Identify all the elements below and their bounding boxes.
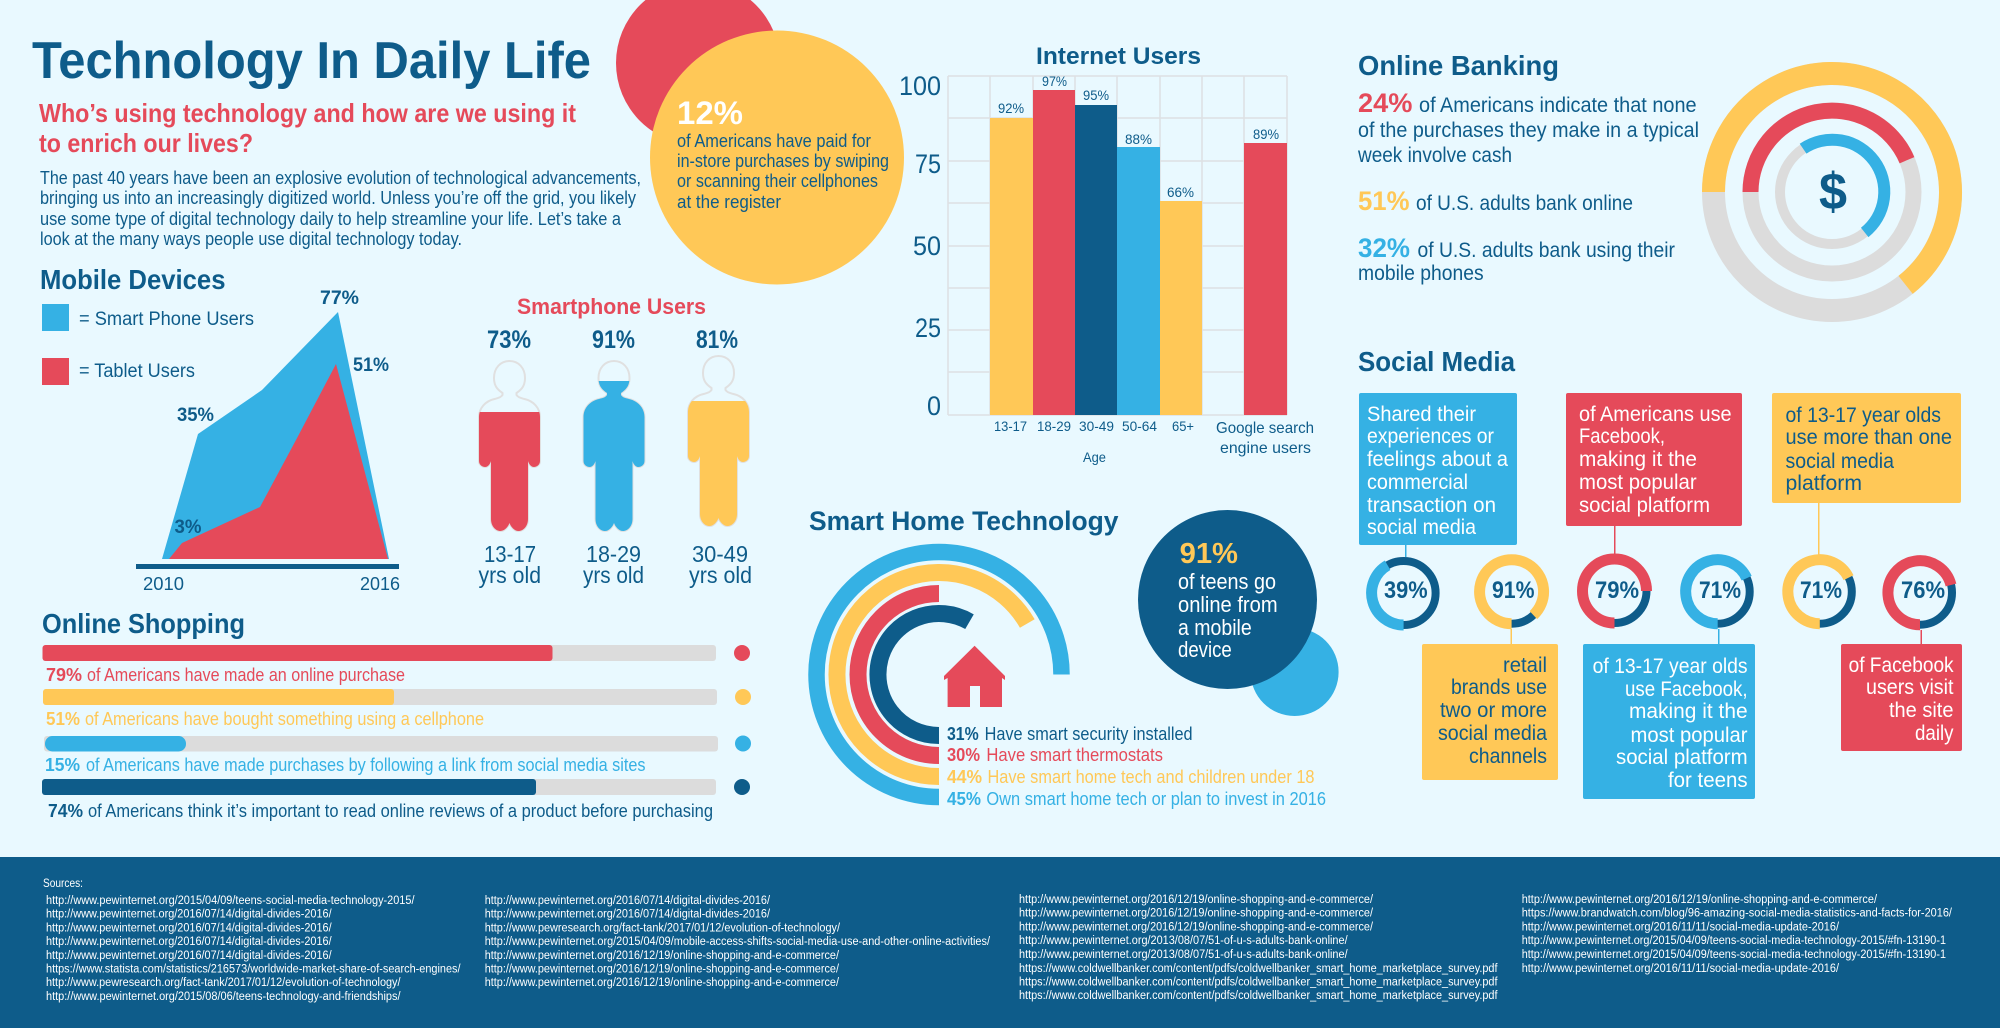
figure: 18-29: 18-29	[586, 541, 641, 567]
callout: 39% shared experiences	[1359, 393, 1517, 625]
heading: smartphone users: Smartphone Users	[517, 294, 706, 319]
bar chart: Age	[1083, 449, 1106, 465]
sources column 1: http://www.pewinternet.org/2016/07/14/digital-divides-2016/	[46, 950, 332, 962]
callout: 71% teens use Facebook: social platform	[1616, 746, 1748, 769]
sources column 2: http://www.pewinternet.org/2016/07/14/digital-divides-2016/	[485, 895, 771, 907]
callout: 12% circles: at the register	[677, 192, 781, 212]
callout: 91% of teens: a mobile	[1178, 615, 1252, 640]
figure: 30-49: 30-49	[692, 541, 748, 567]
sources column 2: http://www.pewinternet.org/2016/12/19/online-shopping-and-e-commerce/	[485, 964, 840, 976]
sources column 2	[485, 895, 991, 989]
callout: 76% visit daily: users visit	[1866, 676, 1954, 699]
bar: social media purchases 15%: 15%	[45, 755, 80, 775]
sources column 1: http://www.pewinternet.org/2015/08/06/teens-technology-and-friendships/	[46, 991, 401, 1003]
sources column 1: http://www.pewinternet.org/2016/07/14/digital-divides-2016/	[46, 922, 332, 934]
figure: 18-29	[583, 326, 644, 588]
callout: 91% of teens: of teens go	[1178, 569, 1276, 594]
stat: 24% no cash	[1357, 88, 1699, 167]
bar chart: 100	[899, 71, 941, 101]
figure: 30-49: 81%	[696, 326, 738, 354]
sources column 3: http://www.pewinternet.org/2013/08/07/51-of-u-s-adults-bank-online/	[1019, 949, 1348, 961]
sources column 3: http://www.pewinternet.org/2016/12/19/online-shopping-and-e-commerce/	[1019, 894, 1374, 906]
radial chart	[816, 552, 1062, 797]
sources column 3: http://www.pewinternet.org/2013/08/07/51-of-u-s-adults-bank-online/	[1019, 935, 1348, 947]
callout: 12% circles: or scanning their cellphones	[677, 171, 878, 191]
bar: bought with cellphone 51%: 51%	[46, 709, 80, 729]
panel: social media	[1358, 346, 1962, 799]
callout: 39% shared experiences: commercial	[1367, 471, 1468, 494]
bar: online reviews 74%: of Americans think it’s important to read online reviews of a product before purchasing	[88, 801, 713, 821]
sources column 3: http://www.pewinternet.org/2016/12/19/online-shopping-and-e-commerce/	[1019, 922, 1374, 934]
callout: 39% shared experiences: feelings about a	[1367, 448, 1508, 471]
legend: smart home stats: 45%	[947, 789, 981, 809]
bar: bought with cellphone 51%: of Americans have bought something using a cellphone	[85, 709, 484, 729]
callout: 91% of teens	[1138, 510, 1339, 716]
callout: 12% circles: of Americans have paid for	[677, 131, 871, 151]
sources column 3	[1019, 894, 1498, 1002]
callout: 76% visit daily: the site	[1889, 699, 1954, 722]
sources column 4: https://www.brandwatch.com/blog/96-amazing-social-media-statistics-and-facts-for-2016/	[1522, 908, 1953, 920]
callout: 76% visit daily: daily	[1915, 722, 1954, 745]
sources column 2: http://www.pewinternet.org/2016/12/19/online-shopping-and-e-commerce/	[485, 950, 840, 962]
legend: smart home stats: Have smart security installed	[985, 724, 1193, 744]
callout: 91% of teens: 91%	[1180, 538, 1238, 570]
intro paragraph: bringing us into an increasingly digitized world. Unless you’re off the grid, you likely	[40, 188, 636, 208]
sources column 3: https://www.coldwellbanker.com/content/pdfs/coldwellbanker_smart_home_marketplace_survey.pdf	[1019, 990, 1498, 1002]
area chart: 77%	[320, 288, 359, 309]
legend: tablet users: = Tablet Users	[79, 361, 195, 382]
bar chart: 65+	[1172, 418, 1194, 434]
panel: mobile devices	[40, 264, 400, 594]
figure: 13-17: 13-17	[484, 541, 536, 567]
panel: smartphone users	[478, 294, 752, 588]
title: Technology In Daily Life	[32, 32, 591, 90]
callout: 91% retail brands	[1422, 560, 1558, 780]
callout: 12% circles: in-store purchases by swiping	[677, 151, 889, 171]
stat: 24% no cash: of Americans indicate that none	[1419, 94, 1697, 117]
stat: 51% bank online	[1358, 186, 1633, 216]
callout: 79% Americans use Facebook: Facebook,	[1579, 425, 1665, 448]
intro paragraph: The past 40 years have been an explosive evolution of technological advancements,	[40, 168, 641, 188]
panel: smart home technology	[809, 506, 1326, 809]
bar chart: 95%	[1083, 87, 1109, 103]
figure: 30-49	[688, 326, 752, 588]
callout: 79% Americans use Facebook: social platform	[1579, 494, 1710, 517]
stat: 32% mobile banking: mobile phones	[1358, 262, 1484, 285]
callout: 79% Americans use Facebook: 79%	[1595, 577, 1639, 604]
area chart: 51%	[353, 355, 389, 376]
callout: 71% teens use Facebook: for teens	[1668, 769, 1748, 792]
area chart	[136, 288, 400, 594]
bar: online purchase 79%: 79%	[46, 665, 82, 685]
callout: 71% teens use Facebook	[1583, 560, 1755, 799]
stat: 24% no cash: 24%	[1358, 88, 1412, 118]
callout: 39% shared experiences: transaction on	[1367, 494, 1496, 517]
ring chart	[1714, 74, 1950, 310]
bar: bought with cellphone 51%	[43, 689, 751, 729]
area chart: 2010	[143, 574, 184, 594]
callout: 91% retail brands: two or more	[1440, 699, 1547, 722]
figure: 13-17	[478, 326, 541, 588]
bar: online reviews 74%: 74%	[48, 801, 83, 821]
bar: social media purchases 15%: of Americans have made purchases by following a link from social media sites	[86, 755, 646, 775]
bar: social media purchases 15%	[44, 736, 751, 775]
bar chart: 88%	[1125, 131, 1152, 147]
panel: online banking	[1357, 50, 1950, 310]
stat: 32% mobile banking: 32%	[1358, 233, 1410, 263]
bar: online reviews 74%	[42, 779, 750, 821]
heading: sources: Sources:	[43, 878, 83, 890]
sources column 3: https://www.coldwellbanker.com/content/pdfs/coldwellbanker_smart_home_marketplace_survey.pdf	[1019, 963, 1498, 975]
area chart: 35%	[177, 405, 214, 426]
bar chart: 25	[915, 313, 941, 343]
sources column 3: https://www.coldwellbanker.com/content/pdfs/coldwellbanker_smart_home_marketplace_survey.pdf	[1019, 976, 1498, 988]
sources column 3: http://www.pewinternet.org/2016/12/19/online-shopping-and-e-commerce/	[1019, 908, 1374, 920]
callout: 12% circles: 12%	[677, 95, 743, 131]
callout: 91% retail brands: social media	[1438, 722, 1547, 745]
figure: 13-17: yrs old	[478, 562, 541, 588]
sources column 2: http://www.pewinternet.org/2016/12/19/online-shopping-and-e-commerce/	[485, 977, 840, 989]
area chart: 3%	[174, 517, 202, 538]
legend: smart home stats: Have smart home tech and children under 18	[988, 767, 1314, 787]
stat: 51% bank online: 51%	[1358, 186, 1410, 216]
callout: 71% more than one platform: platform	[1786, 472, 1862, 495]
callout: 12% circles	[616, 0, 904, 284]
callout: 71% teens use Facebook: of 13-17 year olds	[1593, 655, 1748, 678]
callout: 71% more than one platform: of 13-17 year olds	[1786, 404, 1941, 427]
bar chart: 92%	[998, 100, 1024, 116]
bar chart: 0	[927, 391, 941, 421]
subtitle	[39, 98, 576, 158]
figure: 18-29: yrs old	[583, 562, 644, 588]
bar: online purchase 79%	[42, 645, 750, 685]
callout: 71% more than one platform	[1772, 393, 1961, 624]
intro paragraph	[40, 168, 641, 249]
bar chart: 50	[913, 231, 941, 261]
callout: 76% visit daily	[1841, 561, 1962, 751]
sources column 1: https://www.statista.com/statistics/216573/worldwide-market-share-of-search-engines/	[46, 964, 461, 976]
legend: tablet users	[42, 358, 195, 385]
bar chart: 50-64	[1122, 418, 1157, 434]
figure: 30-49: yrs old	[689, 562, 752, 588]
callout: 39% shared experiences: 39%	[1384, 577, 1428, 604]
callout: 79% Americans use Facebook: of Americans use	[1579, 403, 1732, 426]
intro paragraph: use some type of digital technology daily to help streamline your life. Let’s take a	[40, 209, 622, 229]
callout: 91% of teens: online from	[1178, 592, 1278, 617]
bar chart: 18-29	[1037, 418, 1071, 434]
bar chart: 97%	[1042, 73, 1067, 89]
sources column 2: http://www.pewinternet.org/2015/04/09/mobile-access-shifts-social-media-use-and-other-online-activities/	[485, 936, 991, 948]
heading: smart home technology: Smart Home Technology	[809, 506, 1118, 536]
stat: 24% no cash: of the purchases they make in a typical	[1358, 119, 1699, 142]
sources column 4: http://www.pewinternet.org/2015/04/09/teens-social-media-technology-2015/#fn-13190-1	[1522, 949, 1946, 961]
sources column 1: http://www.pewresearch.org/fact-tank/2017/01/12/evolution-of-technology/	[46, 977, 401, 989]
callout: 71% more than one platform: use more than one	[1786, 426, 1952, 449]
legend: smart phone users: = Smart Phone Users	[79, 309, 254, 330]
callout: 71% teens use Facebook: use Facebook,	[1625, 678, 1748, 701]
callout: 71% teens use Facebook: making it the	[1629, 700, 1748, 723]
sources column 4: http://www.pewinternet.org/2015/04/09/teens-social-media-technology-2015/#fn-13190-1	[1522, 935, 1946, 947]
callout: 79% Americans use Facebook: making it the	[1579, 448, 1697, 471]
heading: online shopping: Online Shopping	[42, 608, 245, 639]
sources column 4: http://www.pewinternet.org/2016/11/11/social-media-update-2016/	[1522, 922, 1840, 934]
sources column 1: http://www.pewinternet.org/2016/07/14/digital-divides-2016/	[46, 936, 332, 948]
icon: house	[944, 646, 1005, 707]
legend: smart phone users	[42, 304, 254, 331]
callout: 76% visit daily: 76%	[1901, 577, 1945, 604]
bar chart: 66%	[1167, 184, 1194, 200]
legend: smart home stats: Own smart home tech or plan to invest in 2016	[986, 789, 1326, 809]
stat: 24% no cash: week involve cash	[1357, 144, 1512, 167]
sources column 1: http://www.pewinternet.org/2016/07/14/digital-divides-2016/	[46, 909, 332, 921]
callout: 76% visit daily: of Facebook	[1849, 654, 1954, 677]
callout: 39% shared experiences: experiences or	[1367, 425, 1494, 448]
heading: mobile devices: Mobile Devices	[40, 264, 226, 295]
callout: 39% shared experiences: Shared their	[1367, 403, 1476, 426]
sources column 4	[1522, 894, 1953, 975]
icon: dollar sign: $	[1819, 163, 1847, 221]
callout: 39% shared experiences: social media	[1367, 516, 1476, 539]
sources column 4: http://www.pewinternet.org/2016/11/11/social-media-update-2016/	[1522, 963, 1840, 975]
callout: 91% retail brands: 91%	[1492, 577, 1534, 604]
callout: 71% teens use Facebook: most popular	[1630, 724, 1748, 747]
bar chart: engine users	[1220, 440, 1311, 457]
subtitle: Who’s using technology and how are we using it	[39, 98, 576, 128]
bar chart: 89%	[1253, 126, 1279, 142]
callout: 79% Americans use Facebook: most popular	[1579, 471, 1697, 494]
bar chart: 30-49	[1079, 418, 1114, 434]
heading: online banking: Online Banking	[1358, 50, 1559, 81]
bar chart	[899, 71, 1314, 465]
callout: 91% retail brands: retail	[1503, 654, 1547, 677]
legend: smart home stats: 30%	[947, 745, 980, 765]
callout: 91% retail brands: channels	[1469, 745, 1547, 768]
stat: 32% mobile banking	[1358, 233, 1675, 285]
legend: smart home stats: 44%	[947, 767, 982, 787]
panel: intro header	[32, 32, 641, 249]
bar: online purchase 79%: of Americans have made an online purchase	[87, 665, 405, 685]
bar chart: 75	[915, 149, 941, 179]
legend: smart home stats: Have smart thermostats	[986, 745, 1163, 765]
legend: smart home stats: 31%	[947, 724, 979, 744]
heading: social media: Social Media	[1358, 346, 1515, 377]
panel: online shopping	[42, 608, 751, 821]
callout: 91% of teens: device	[1178, 637, 1232, 662]
callout: 79% Americans use Facebook	[1566, 393, 1742, 623]
subtitle: to enrich our lives?	[39, 128, 253, 158]
sources column 4: http://www.pewinternet.org/2016/12/19/online-shopping-and-e-commerce/	[1522, 894, 1878, 906]
callout: 71% more than one platform: social media	[1786, 450, 1894, 473]
stat: 51% bank online: of U.S. adults bank online	[1416, 192, 1633, 215]
area chart: 2016	[360, 574, 400, 594]
panel: sources footer	[0, 857, 2000, 1028]
callout: 71% teens use Facebook: 71%	[1699, 577, 1741, 604]
intro paragraph: look at the many ways people use digital technology today.	[40, 229, 462, 249]
sources column 1: http://www.pewinternet.org/2015/04/09/teens-social-media-technology-2015/	[46, 895, 415, 907]
sources column 2: http://www.pewinternet.org/2016/07/14/digital-divides-2016/	[485, 909, 771, 921]
legend: smart home stats	[947, 724, 1326, 809]
callout: 71% more than one platform: 71%	[1800, 577, 1842, 604]
bar chart: 13-17	[994, 418, 1027, 434]
bar chart: Google search	[1216, 420, 1314, 437]
figure: 18-29: 91%	[592, 326, 635, 354]
panel: internet users	[899, 43, 1314, 465]
heading: internet users: Internet Users	[1036, 43, 1201, 70]
callout: 91% retail brands: brands use	[1451, 676, 1547, 699]
figure: 13-17: 73%	[487, 326, 531, 354]
stat: 32% mobile banking: of U.S. adults bank using their	[1418, 239, 1675, 262]
sources column 1	[46, 895, 461, 1003]
sources column 2: http://www.pewresearch.org/fact-tank/2017/01/12/evolution-of-technology/	[485, 922, 841, 934]
